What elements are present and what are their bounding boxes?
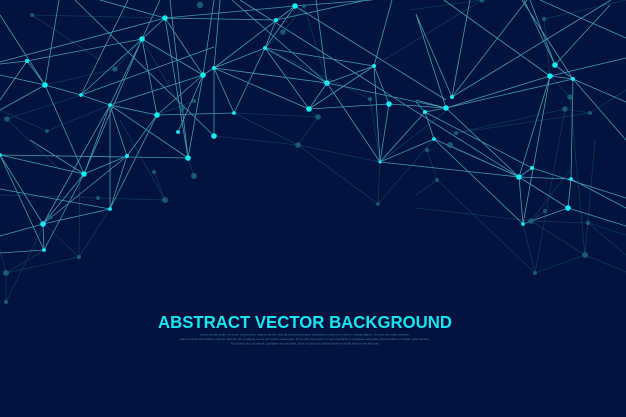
body text: quis nostrud exercitation ullamco laboris nisi ut aliquip ex ea commodo consequat. Duis aute irure dolor in reprehenderit in voluptate velit esse cillum dolore eu fugiat nulla pariatur.	[180, 337, 430, 341]
faint nodes	[3, 0, 592, 304]
faint background network lines	[0, 0, 626, 302]
bright network lines	[0, 0, 626, 253]
body text: Excepteur sint occaecat cupidatat non proident, sunt in culpa qui officia deserunt mollit anim id est laborum.	[231, 342, 380, 346]
bright nodes	[0, 3, 575, 252]
body text: Lorem ipsum dolor sit amet, consectetur adipiscing elit, sed do eiusmod tempor incididunt ut labore et dolore magna aliqua. Ut enim ad minim veniam,	[200, 333, 410, 337]
body text	[180, 333, 430, 346]
title: ABSTRACT VECTOR BACKGROUND	[158, 312, 452, 332]
